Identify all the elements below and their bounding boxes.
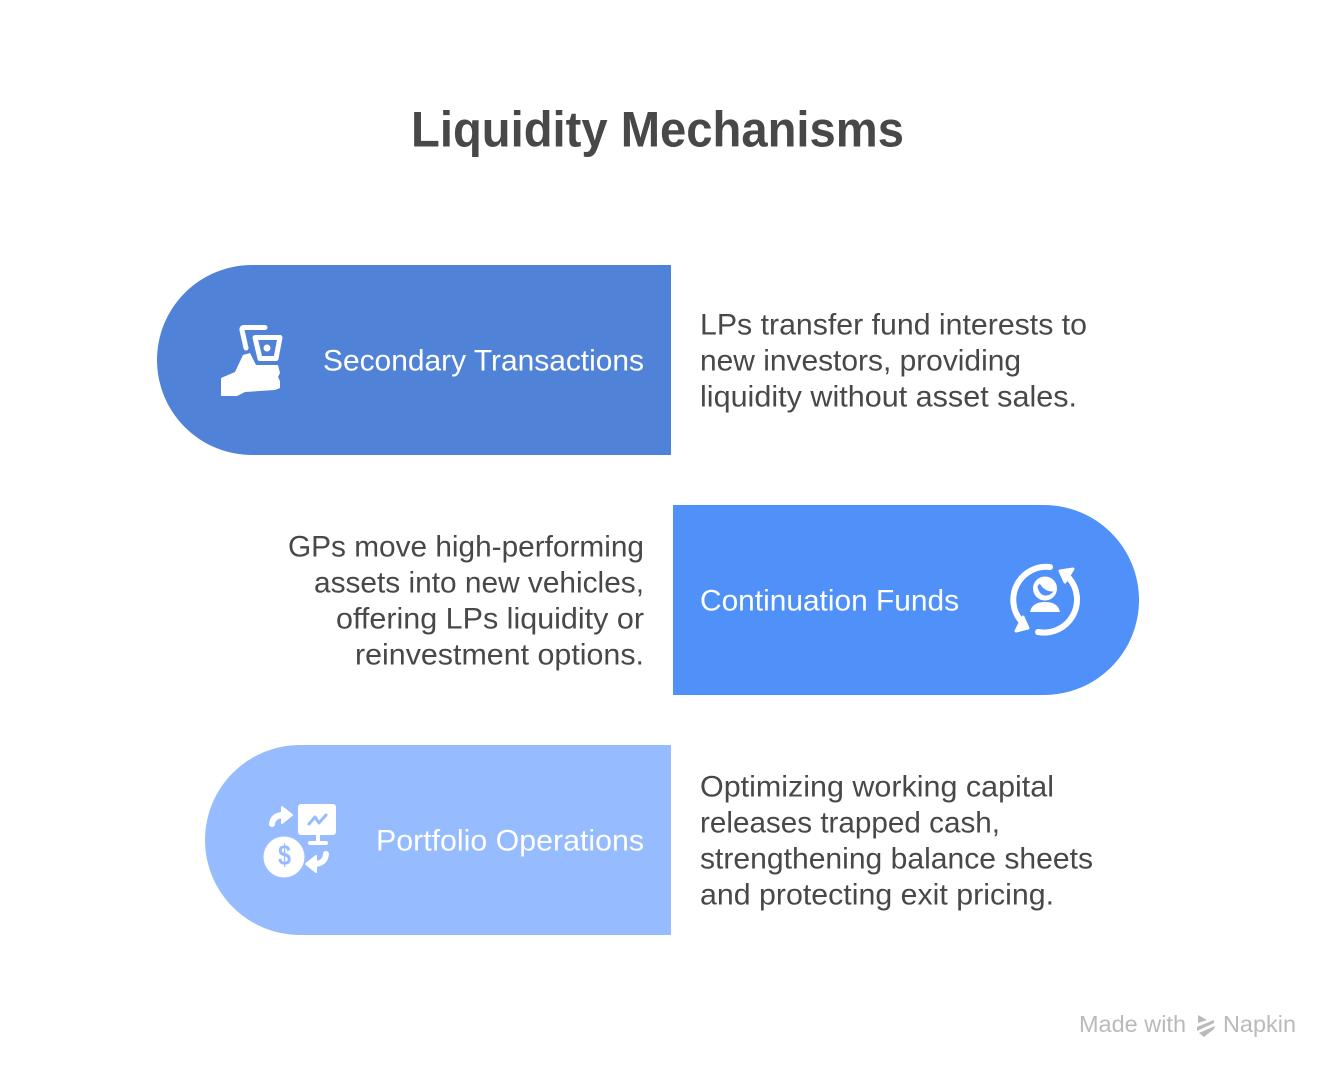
title: Liquidity Mechanisms [411,102,904,158]
pill background [673,505,1139,695]
description: continuation funds: offering LPs liquidity or [336,602,644,636]
description: portfolio operations: Optimizing working capital [700,770,1054,804]
description: portfolio operations: releases trapped cash, [700,806,1000,840]
description: portfolio operations: strengthening balance sheets [700,842,1093,876]
description: secondary transactions: new investors, providing [700,344,1021,378]
panel: continuation funds [673,505,1139,695]
panel: secondary transactions [157,265,671,455]
description: secondary transactions: liquidity without asset sales. [700,380,1077,414]
description: portfolio operations: and protecting exit pricing. [700,878,1054,912]
icon: person in circular arrows [1013,567,1077,633]
description: continuation funds: reinvestment options. [355,638,644,672]
label: Portfolio Operations [376,824,644,858]
description: continuation funds: GPs move high-performing [288,530,644,564]
icon: hand holding cards [221,328,280,396]
icon: money and chart exchange [264,804,336,878]
description: secondary transactions: LPs transfer fund interests to [700,308,1087,342]
footer: made with napkin: Made with [1079,1011,1186,1037]
label: Continuation Funds [700,584,959,618]
pill background [205,745,671,935]
label: Secondary Transactions [323,344,644,378]
footer: made with napkin [1079,1011,1296,1037]
description: continuation funds [288,530,644,672]
pill background [157,265,671,455]
description: portfolio operations [700,770,1093,912]
footer: made with napkin: Napkin [1223,1011,1296,1037]
icon: money and chart exchange: $ [278,840,291,872]
icon: napkin logo [1197,1015,1215,1037]
description: secondary transactions [700,308,1087,414]
description: continuation funds: assets into new vehicles, [314,566,644,600]
panel: portfolio operations [205,745,671,935]
